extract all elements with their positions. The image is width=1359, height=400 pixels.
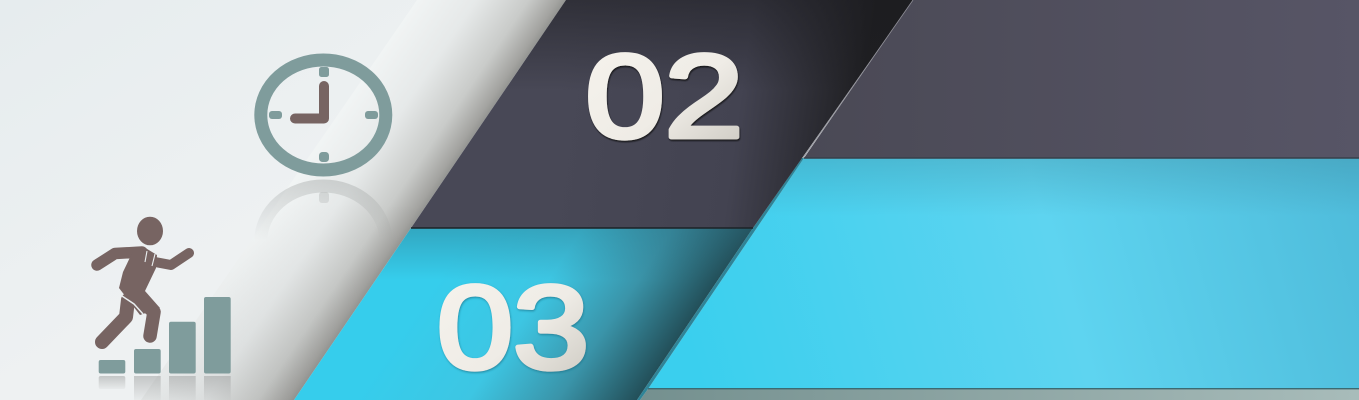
panel: light background — [0, 0, 620, 400]
icon: rising bar chart — [99, 297, 231, 374]
panel: dark parallelogram 02 — [411, 0, 913, 228]
panel: cyan parallelogram 03 — [294, 158, 804, 400]
panel: folded light wedge — [141, 0, 566, 400]
icon: clock reflection — [261, 186, 386, 241]
panel: cyan band right — [648, 158, 1359, 389]
number 03: 03 — [437, 262, 589, 394]
icon: clock — [261, 60, 386, 170]
number 02: 02 — [586, 31, 744, 163]
icon: running businessman — [97, 217, 189, 342]
bar chart reflection — [99, 376, 231, 400]
panel: dark band right — [804, 0, 1359, 158]
panel: bottom strip — [640, 389, 1359, 400]
